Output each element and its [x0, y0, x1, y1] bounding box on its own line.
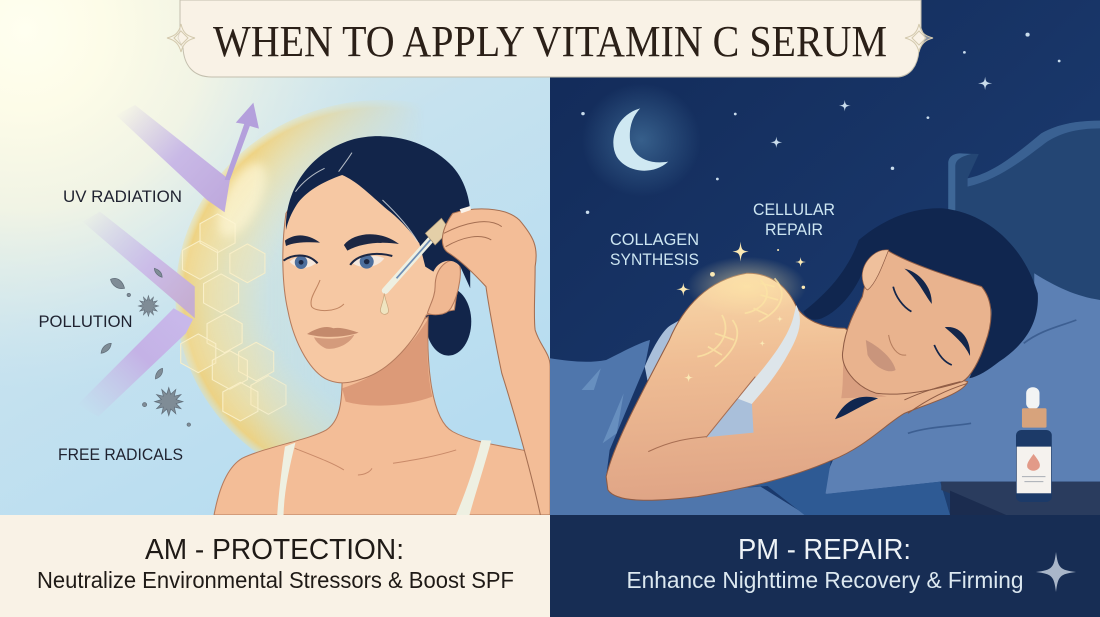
- arm crease: [648, 377, 755, 452]
- label: cellular repair: CELLULAR: [753, 200, 835, 219]
- finger lines: [444, 222, 502, 247]
- face: [283, 150, 461, 383]
- AM heading: AM - PROTECTION:: [145, 534, 404, 566]
- hair strand under hand: [835, 397, 878, 419]
- sun glow: [0, 0, 550, 516]
- camisole front panel: [706, 377, 755, 437]
- hair highlight: [295, 153, 418, 242]
- DNA strands: [697, 278, 782, 367]
- label: cellular repair: [753, 200, 835, 239]
- hair behind: [803, 208, 1038, 378]
- reflected arrow: [225, 103, 259, 180]
- tank top straps: [277, 440, 491, 515]
- lips: [866, 340, 896, 371]
- panel: AM morning scene: [0, 0, 590, 516]
- icon: sparkle: [1036, 552, 1076, 592]
- arm and shoulder: [606, 273, 968, 500]
- label: cellular repair: REPAIR: [765, 220, 823, 239]
- vitamin C honeycomb shield: [176, 100, 412, 452]
- label: UV radiation: UV RADIATION: [63, 187, 182, 206]
- PM description: Enhance Nighttime Recovery & Firming: [626, 567, 1024, 593]
- label: pollution: POLLUTION: [38, 312, 132, 331]
- pillow: [821, 273, 1100, 494]
- camisole back: [645, 310, 697, 420]
- night illustration: [550, 33, 1100, 515]
- collarbone lines: [295, 448, 456, 475]
- sparkles: [676, 242, 806, 382]
- hair bun: [426, 288, 471, 356]
- ornament: left diamond: [167, 24, 195, 52]
- sleeping woman: [606, 208, 1038, 500]
- beam: pollution ray: [82, 212, 195, 318]
- beam: free radicals ray: [77, 308, 193, 417]
- hand fingers: [904, 382, 968, 413]
- AM description: Neutralize Environmental Stressors & Boost SPF: [37, 567, 514, 593]
- morning sky background: [0, 0, 550, 516]
- nose: [889, 335, 906, 355]
- neck shadow: [841, 350, 887, 398]
- camisole strap over shoulder: [737, 305, 800, 404]
- shoulder glow: [687, 257, 806, 317]
- left eye: [284, 255, 318, 269]
- serum dropper: [380, 218, 450, 314]
- pollution particles: [101, 268, 191, 426]
- caption background: [550, 515, 1100, 617]
- ear: [862, 250, 889, 290]
- serum bottle: [1016, 387, 1052, 502]
- eyebrows: [285, 234, 399, 251]
- serum drop: [380, 293, 388, 314]
- closed eyes: [893, 287, 952, 365]
- neck shadow: [342, 320, 432, 406]
- blanket: [550, 340, 806, 515]
- nightstand: [941, 482, 1100, 515]
- label: free radicals: FREE RADICALS: [58, 445, 183, 464]
- stars: [581, 33, 1061, 214]
- title banner: [167, 0, 933, 77]
- panel: PM night scene: [550, 0, 1100, 516]
- panel: PM caption: [550, 515, 1100, 617]
- nose: [311, 280, 344, 311]
- face: [843, 250, 991, 394]
- crescent moon: [613, 108, 668, 171]
- hair: [286, 136, 471, 288]
- PM heading: PM - REPAIR:: [738, 534, 911, 566]
- moon glow: [582, 83, 701, 197]
- night sky background: [550, 0, 1100, 516]
- fingernails: [460, 206, 471, 213]
- hand and forearm: [442, 209, 550, 515]
- ornament: right diamond: [905, 24, 933, 52]
- eyebrows: [904, 269, 970, 356]
- label: collagen synthesis: COLLAGEN: [610, 230, 699, 249]
- headboard: [948, 121, 1100, 333]
- panel: AM caption: [0, 515, 550, 617]
- drop logo: [1027, 454, 1040, 471]
- lips: [307, 327, 359, 349]
- woman applying serum: [214, 136, 550, 515]
- label: collagen synthesis: [610, 230, 699, 269]
- ear: [427, 260, 460, 315]
- beam: UV ray reflected: [116, 103, 259, 212]
- shoulders and neck: [214, 317, 550, 515]
- caption background: [0, 515, 550, 617]
- title text: WHEN TO APPLY VITAMIN C SERUM: [213, 17, 887, 66]
- right eye: [350, 254, 392, 269]
- label: collagen synthesis: SYNTHESIS: [610, 250, 699, 269]
- banner shape: [178, 0, 925, 77]
- morning illustration: [89, 100, 550, 515]
